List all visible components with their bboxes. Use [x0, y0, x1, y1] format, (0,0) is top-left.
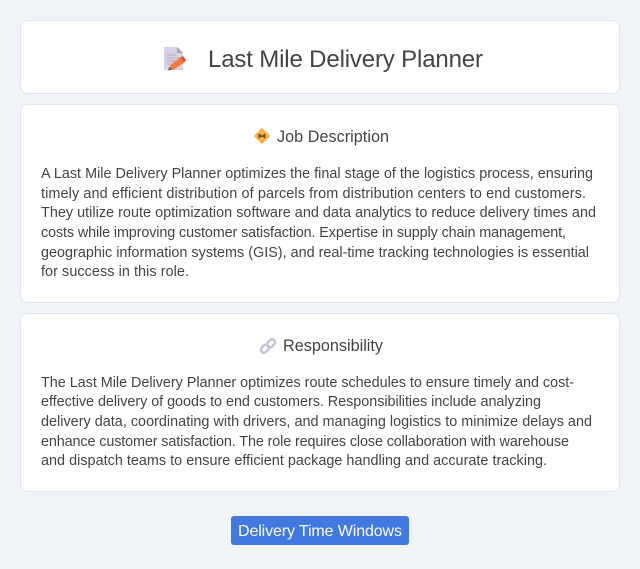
button: delivery time windows — [231, 516, 409, 545]
text: job description body: geographic information systems (GIS), and real-time tracking technologies is essential — [41, 245, 589, 261]
text: responsibility body: effective delivery of goods to end customers. Responsibilities include analyzing — [41, 394, 541, 410]
text: responsibility body: and dispatch teams to ensure efficient package handling and accurate tracking. — [41, 453, 547, 469]
text: job description body: A Last Mile Delivery Planner optimizes the final stage of the logistics process, ensuring — [41, 166, 593, 182]
text: responsibility body — [41, 375, 592, 469]
button: delivery time windows: Delivery Time Windows — [238, 523, 402, 540]
icon: chain link — [260, 338, 276, 354]
text: responsibility body: delivery data, coordinating with drivers, and managing logistics to minimize delays and — [41, 414, 592, 430]
panel: job description — [20, 104, 620, 303]
text: job description body: They utilize route optimization software and data analytics to reduce delivery times and — [41, 205, 596, 221]
text: job description body: timely and efficient distribution of parcels from distribution centers to end customers. — [41, 186, 586, 202]
heading: title: Last Mile Delivery Planner — [208, 46, 483, 73]
icon: document with pencil — [164, 47, 186, 70]
text: responsibility body: The Last Mile Delivery Planner optimizes route schedules to ensure timely and cost- — [41, 375, 574, 391]
text: job description body: for success in this role. — [41, 264, 189, 280]
text: responsibility body: enhance customer satisfaction. The role requires close collaboration with warehouse — [41, 434, 569, 450]
text: job description body: costs while improving customer satisfaction. Expertise in supply chain management, — [41, 225, 566, 241]
text: job description body — [41, 166, 596, 280]
heading: responsibility: Responsibility — [283, 337, 384, 355]
panel: title — [20, 20, 620, 94]
heading: job description: Job Description — [277, 128, 389, 146]
icon: road sign — [254, 128, 270, 144]
panel: responsibility — [20, 313, 620, 492]
